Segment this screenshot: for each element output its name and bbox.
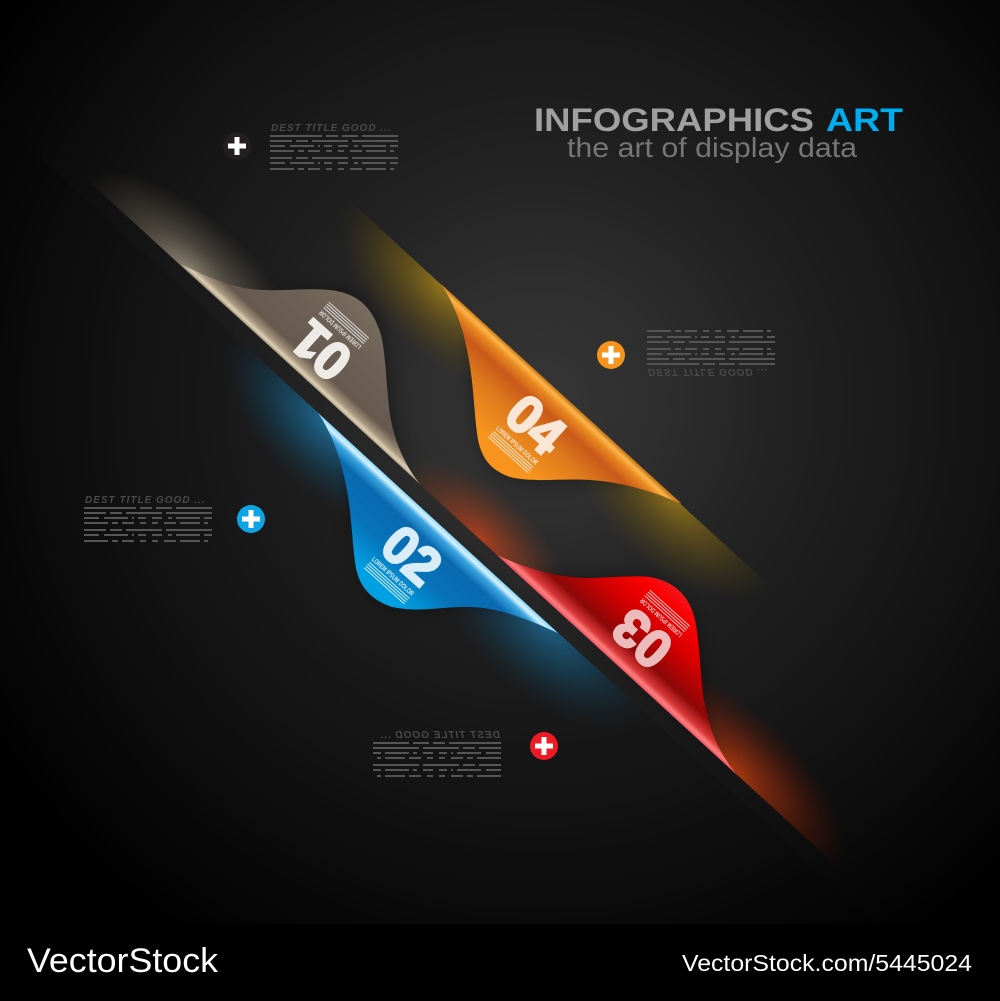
icon: red plus [530,732,558,760]
fold shape 04 [441,284,682,504]
glow: blue upper tail [236,347,407,504]
fold shape 03 [497,555,737,775]
block heading: DEST TITLE GOOD ... [271,123,392,134]
panel 03: red fold [497,555,737,775]
block heading: DEST TITLE GOOD ... [379,730,500,741]
panel 02: blue fold [318,413,558,633]
panel 04: orange fold [441,284,682,504]
icon: blue plus [237,505,265,533]
glow: red lower tail [702,684,835,858]
footer url: VectorStock.com/5445024 [682,950,972,976]
text block right [647,331,775,377]
number 03 with caption: 03 [601,597,684,680]
number 02 with caption: 02 [370,514,453,597]
footer logo: VectorStock [27,942,219,980]
fold shape 02 [318,413,558,633]
text block left [84,495,212,541]
number 01 with caption: LOREM IPSUM DOLOR [318,308,363,350]
text block top left [270,123,398,169]
text block bottom [373,730,501,776]
number 01 with caption: 01 [280,309,363,392]
block heading: DEST TITLE GOOD ... [648,366,769,377]
block heading: DEST TITLE GOOD ... [85,495,206,506]
glow: brown upper tail [98,182,276,352]
number 02 with caption: LOREM IPSUM DOLOR [370,556,415,598]
glow: brown to red middle [414,468,554,584]
title accent: ART [826,102,904,138]
panel 01: brown fold [180,264,420,484]
fold shadows [260,290,730,765]
footer strip [0,924,1000,1001]
title [534,102,904,163]
number 03 with caption: LOREM IPSUM DOLOR [639,596,684,638]
number 04 with caption: LOREM IPSUM DOLOR [494,425,539,467]
icon: orange plus [597,341,625,369]
glow: orange upper tail [354,213,470,366]
icon: dark plus [223,132,251,160]
glow: orange lower tail [596,481,756,586]
subtitle: the art of display data [567,132,857,163]
glow: blue lower tail [463,554,634,716]
number 04 with caption: 04 [494,383,577,466]
title main: INFOGRAPHICS [534,102,814,138]
fold shape 01 [180,264,420,484]
